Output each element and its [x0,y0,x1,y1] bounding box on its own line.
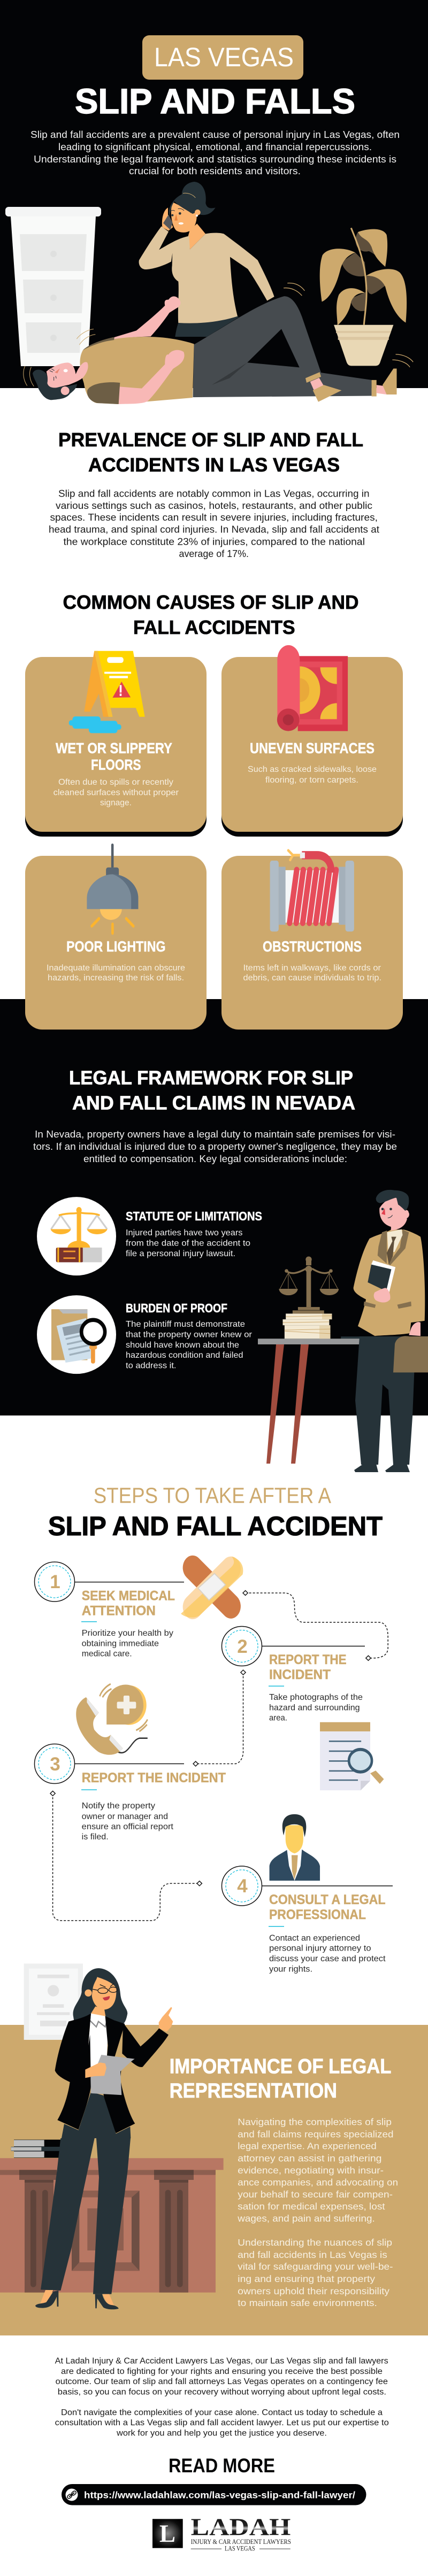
step text: medical care. [82,1650,132,1659]
step text: obtaining immediate [82,1639,159,1649]
text block: ing and ensuring that property [238,2273,375,2284]
text block: closing: basis, so you can focus on your recovery without worrying about upfront legal costs. [58,2387,386,2397]
intro text: Understanding the legal framework and statistics surrounding these incidents is [34,154,396,165]
step text: Take photographs of the [269,1693,363,1702]
step text [82,1629,173,1659]
text block: Navigating the complexities of slip [238,2117,392,2128]
text block: wages, and pain and suffering. [237,2213,375,2224]
text block: Understanding the nuances of slip [238,2237,392,2248]
call to action heading: READ MORE [169,2455,275,2477]
text block: vital for safeguarding your well-be- [238,2261,393,2272]
text block: and fall claims requires specialized [238,2129,394,2139]
logo: Ladah: LAS VEGAS [225,2545,255,2552]
heading: legal framework: AND FALL CLAIMS IN NEVADA [72,1092,355,1114]
number badge: 2 [237,1636,248,1657]
step 2: report the incident [221,1626,384,1790]
step 3: report the incident [34,1684,226,1842]
card title: UNEVEN SURFACES [250,740,374,756]
text block: statute of limitations: from the date of the accident to [126,1239,250,1248]
step 1: seek medical attention [34,1557,243,1659]
heading: legal framework: LEGAL FRAMEWORK FOR SLIP [69,1067,353,1088]
logo: Ladah [152,2513,291,2552]
heading: common causes: FALL ACCIDENTS [133,616,295,638]
card title: FLOORS [91,756,141,773]
text block: closing: At Ladah Injury & Car Accident Lawyers Las Vegas, our Las Vegas slip and fall lawyers [55,2357,388,2366]
heading: steps [48,1483,383,1541]
step title: SEEK MEDICAL [82,1588,175,1603]
illustration: table with scales and papers [258,1256,361,1464]
step text: is filed. [82,1832,109,1842]
icon: rolled rug [277,645,348,731]
number badge [221,1626,262,1666]
text block: and fall accidents in Las Vegas is [238,2249,387,2260]
text block: owners uphold their responsibility [238,2286,389,2296]
step text: owner or manager and [82,1812,168,1821]
card title: WET OR SLIPPERY [56,740,172,756]
intro text: Slip and fall accidents are a prevalent cause of personal injury in Las Vegas, often [30,129,400,140]
panel: legal framework background [0,999,428,1415]
card text: signage. [100,799,132,808]
logo: Ladah: INJURY & CAR ACCIDENT LAWYERS [191,2538,291,2546]
text block: closing: outcome. Our team of slip and fall attorneys Las Vegas operates on a contingency fee [56,2377,388,2386]
heading: steps: STEPS TO TAKE AFTER A [94,1483,332,1508]
text block: burden of proof: BURDEN OF PROOF [126,1301,227,1315]
step title: REPORT THE [269,1652,347,1667]
step title [269,1652,347,1682]
panel: cause obstructions [221,850,403,1030]
step title: PROFESSIONAL [269,1907,366,1922]
text block [237,2117,398,2308]
heading: prevalence [58,429,363,476]
text block: prevalence: spaces. These incidents can result in severe injuries, including fractures, [50,512,378,523]
icon: attorney bust [270,1814,320,1881]
briefcase [393,1336,428,1373]
illustration: woman on the phone [139,182,274,337]
text block: burden of proof [126,1301,253,1371]
step text: Notify the property [82,1801,155,1811]
intro text [30,129,400,176]
text block: evidence, negotiating with insur- [238,2165,384,2176]
card title [56,740,172,773]
heading: prevalence: ACCIDENTS IN LAS VEGAS [88,454,340,476]
card text: cleaned surfaces without proper [54,788,179,798]
text block: prevalence: average of 17%. [179,548,249,559]
text block: closing: Don't navigate the complexities of your case alone. Contact us today to schedule a [61,2408,383,2417]
step text: Prioritize your health by [82,1629,173,1638]
panel: cause poor lighting [25,844,207,1030]
text block: your behalf to secure fair compen- [238,2189,393,2200]
illustration: fallen man's torso and head [24,296,194,404]
step 4: consult a legal professional [221,1814,393,1974]
text block: prevalence [49,489,379,559]
heading: legal framework [69,1067,355,1114]
step text: Contact an experienced [269,1934,360,1943]
text block: prevalence: Slip and fall accidents are notably common in Las Vegas, occurring in [58,489,369,499]
card text [54,778,179,808]
step text: personal injury attorney to [269,1944,371,1953]
badge: Las Vegas [142,35,303,80]
text block: prevalence: the workplace constitute 23% of injuries, compared to the national [63,536,365,547]
title: SLIP AND FALLS [75,81,355,121]
icon: folder and magnifier [37,1295,116,1374]
number badge [34,1562,75,1602]
illustration: desk and books [0,2138,224,2309]
icon: bandage [181,1557,243,1618]
heading [170,2055,391,2102]
panel: hero [0,0,428,404]
card text [47,963,185,983]
text block: legal framework: In Nevada, property owners have a legal duty to maintain safe premises for visi- [35,1129,395,1140]
logo: Ladah: LADAH [191,2513,291,2540]
text block: ance companies, and advocating on [238,2177,398,2187]
card title: POOR LIGHTING [66,938,166,955]
step title: ATTENTION [82,1603,156,1618]
step text: discuss your case and protect [269,1954,386,1963]
text block: sation for medical expenses, lost [238,2201,385,2211]
heading: REPRESENTATION [170,2079,337,2102]
heading: IMPORTANCE OF LEGAL [170,2055,391,2078]
step title: REPORT THE INCIDENT [82,1770,226,1785]
text block: closing: consultation with a Las Vegas slip and fall accident lawyer. Let us put our expertise to [55,2418,389,2427]
dashed connectors [50,1591,388,1921]
illustration: male lawyer [354,1190,428,1472]
icon: hose reel [270,850,354,932]
illustration: fallen man's legs [193,283,413,402]
number badge [34,1744,75,1783]
text block: burden of proof: hazardous condition and failed [126,1351,243,1360]
icon: phone with medical bubble [76,1684,148,1755]
intro text: leading to significant physical, emotional, and financial repercussions. [58,142,372,152]
card text: Items left in walkways, like cords or [243,963,381,973]
number badge: 1 [50,1572,60,1592]
illustration: female attorney [55,1968,173,2138]
step text: area. [269,1714,287,1722]
text block: prevalence: head trauma, and spinal cord injuries. In Nevada, slip and fall accidents at [49,524,379,535]
step text: your rights. [269,1965,312,1974]
panel: cause uneven surfaces [221,645,403,837]
text block: statute of limitations: STATUTE OF LIMITATIONS [126,1209,262,1223]
card text [243,963,381,983]
text block: to maintain safe environments. [238,2297,377,2308]
step title [82,1588,175,1618]
card text: hazards, increasing the risk of falls. [48,973,184,983]
number badge: 4 [237,1876,248,1897]
text block: closing: are dedicated to fighting for your rights and ensuring you receive the best possible [61,2367,383,2376]
step text [269,1934,386,1974]
text block: legal framework: entitled to compensation. Key legal considerations include: [83,1154,347,1164]
link pill [62,2484,366,2505]
icon: link [65,2489,78,2501]
heading: common causes [63,591,358,638]
illustration: potted plant [320,228,407,366]
logo: Ladah: L [159,2520,175,2548]
number badge [221,1866,262,1906]
text block: attorney can assist in gathering [238,2153,382,2163]
step title: INCIDENT [269,1667,331,1682]
card title: OBSTRUCTIONS [263,938,362,955]
step text: ensure an official report [82,1822,174,1831]
text block: burden of proof: The plaintiff must demonstrate [126,1320,245,1329]
link pill: https://www.ladahlaw.com/las-vegas-slip-and-fall-lawyer/ [84,2490,355,2501]
card text: Such as cracked sidewalks, loose [248,765,377,774]
icon: scales and books [37,1197,116,1275]
card text: Often due to spills or recently [58,778,173,787]
text block: closing [55,2357,389,2438]
step title [269,1892,386,1922]
heading: prevalence: PREVALENCE OF SLIP AND FALL [58,429,363,451]
card text: debris, can cause individuals to trip. [243,973,381,983]
text block: closing: work for you and help you get the justice you deserve. [116,2429,327,2438]
badge: Las Vegas: LAS VEGAS [154,42,294,72]
text block: prevalence: various settings such as casinos, hotels, restaurants, and other public [56,500,372,511]
illustration: cabinet [5,207,101,366]
icon: hanging lamp [87,844,138,933]
step text: hazard and surrounding [269,1703,360,1712]
text block: burden of proof: that the property owner knew or [126,1330,253,1340]
icon: wet floor sign [69,651,145,733]
card text [248,765,377,785]
intro text: crucial for both residents and visitors. [129,166,301,176]
heading: common causes: COMMON CAUSES OF SLIP AND [63,591,358,613]
panel: cause wet or slippery floors [25,651,207,837]
text block: legal expertise. An experienced [238,2140,377,2151]
text block: statute of limitations: Injured parties have two years [126,1228,243,1237]
text block: statute of limitations: file a personal injury lawsuit. [126,1249,235,1258]
text block: burden of proof: to address it. [126,1361,177,1371]
heading: steps: SLIP AND FALL ACCIDENT [48,1511,383,1541]
step title: CONSULT A LEGAL [269,1892,386,1907]
icon: document and magnifier [320,1722,384,1790]
text block: burden of proof: should have known about the [126,1341,239,1350]
number badge: 3 [50,1754,60,1775]
card text: flooring, or torn carpets. [265,776,358,785]
illustration: certificate [24,1963,83,2040]
step text [269,1693,363,1722]
text block: statute of limitations [126,1209,262,1258]
text block: legal framework: tors. If an individual is injured due to a property owner's negligence, they may be [33,1141,397,1152]
step text [82,1801,174,1842]
panel: importance of legal representation [0,1963,428,2335]
text block: legal framework [33,1129,397,1164]
card text: Inadequate illumination can obscure [47,963,185,973]
